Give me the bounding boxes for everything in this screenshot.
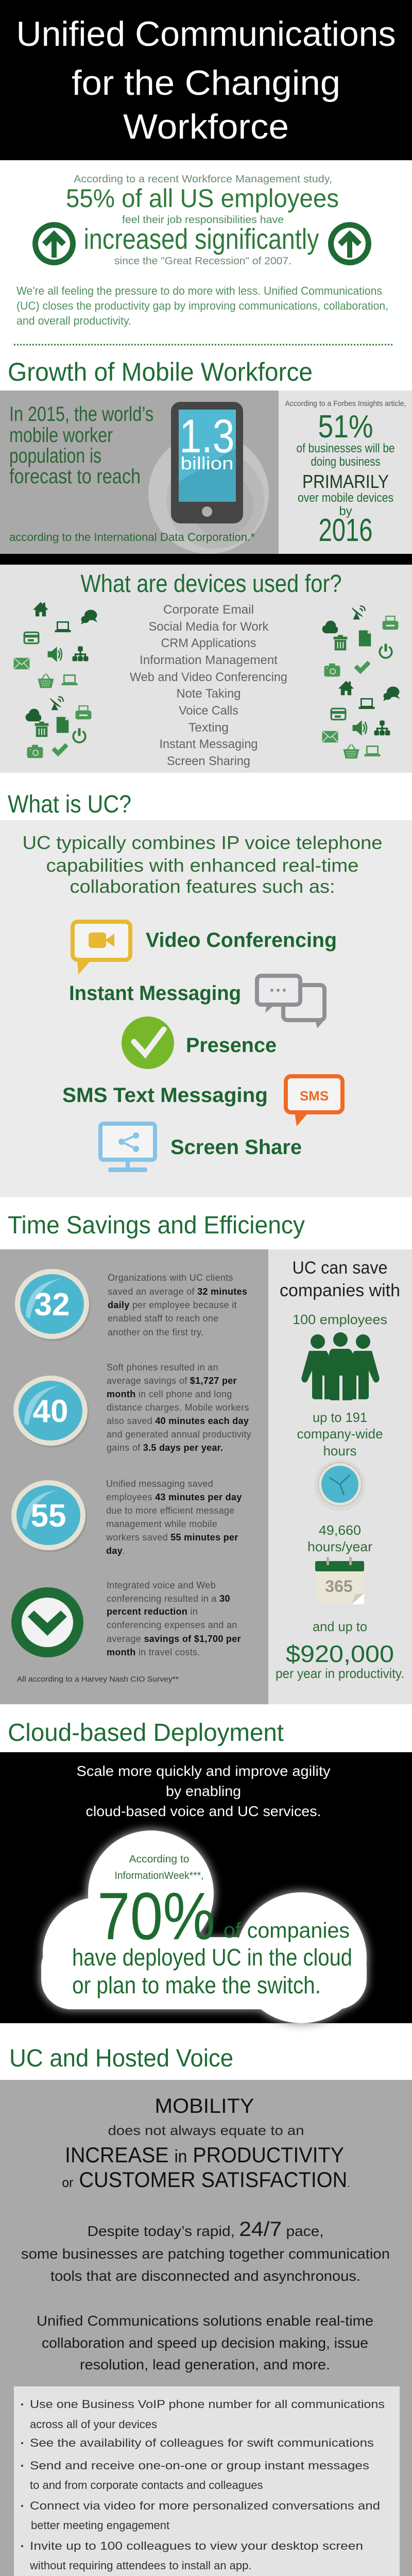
panel: time savings stats xyxy=(0,1249,268,1704)
panel: UC and hosted voice xyxy=(0,2080,412,2576)
text: stat 1: saved an average of 32 minutes xyxy=(108,1286,247,1297)
text: stat 4: percent reduction in xyxy=(107,1606,198,1617)
panel: UC can save companies: up to 191 xyxy=(313,1410,367,1425)
panel: forbes statistic: doing business xyxy=(311,455,380,469)
feature: screen share: Screen Share xyxy=(170,1136,302,1159)
paragraph: despite 24/7: some businesses are patching together communication xyxy=(21,2246,390,2262)
device uses list: Corporate Email xyxy=(163,603,254,617)
paragraph: UC solutions: collaboration and speed up decision making, issue xyxy=(42,2335,368,2351)
benefits list box: without requiring attendees to install an app. xyxy=(29,2559,252,2572)
intro statistic: increased significantly xyxy=(83,223,319,255)
paragraph: UC solutions: Unified Communications solutions enable real-time xyxy=(37,2313,373,2329)
device uses list xyxy=(130,603,287,768)
benefits list box: Connect via video for more personalized conversations and xyxy=(30,2499,380,2512)
text: stat 4: conferencing resulted in a 30 xyxy=(107,1594,230,1604)
intro paragraph xyxy=(16,284,388,327)
mobility statement: or CUSTOMER SATISFACTION. xyxy=(62,2167,350,2192)
feature: presence: Presence xyxy=(186,1034,277,1057)
panel: forbes statistic: According to a Forbes Insights article, xyxy=(285,399,406,408)
intro paragraph: and overall productivity. xyxy=(16,314,131,327)
paragraph: despite 24/7: tools that are disconnected and asynchronous. xyxy=(50,2268,360,2284)
benefits list box: See the availability of colleagues for swift communications xyxy=(30,2436,374,2449)
title banner: for the Changing xyxy=(72,63,340,103)
mobility statement: does not always equate to an xyxy=(108,2123,304,2138)
icon: calendar 365: 365 xyxy=(325,1577,353,1596)
paragraph: despite 24/7 xyxy=(21,2218,390,2284)
icon: smartphone xyxy=(171,402,243,523)
device uses list: Instant Messaging xyxy=(160,737,258,751)
device uses list: Social Media for Work xyxy=(148,620,269,634)
text: stat 2: Soft phones resulted in an xyxy=(107,1362,218,1372)
cloud callout: or plan to make the switch. xyxy=(72,1972,321,1998)
icon: up arrow right xyxy=(328,222,371,265)
device uses list: Web and Video Conferencing xyxy=(130,670,287,684)
panel: cloud deployment: by enabling xyxy=(166,1783,241,1799)
mobility statement: INCREASE in PRODUCTIVITY xyxy=(65,2143,344,2167)
feature: video conferencing: Video Conferencing xyxy=(146,929,337,952)
text: stat 4 xyxy=(107,1580,241,1657)
heading: devices: What are devices used for? xyxy=(80,570,342,598)
panel: forbes statistic: PRIMARILY xyxy=(302,471,389,492)
panel: forbes statistic: 2016 xyxy=(318,513,373,548)
benefits list box: across all of your devices xyxy=(30,2418,157,2431)
device uses list: Screen Sharing xyxy=(167,754,250,768)
stat circle 40 xyxy=(13,1376,89,1448)
text: stat 4: average savings of $1,700 per xyxy=(107,1634,241,1644)
panel: UC can save companies: 100 employees xyxy=(293,1312,387,1327)
benefits list box: Send and receive one-on-one or group instant messages xyxy=(30,2459,369,2472)
mobility statement xyxy=(62,2095,350,2192)
heading: what is UC: What is UC? xyxy=(8,791,131,818)
text: stat 1: Organizations with UC clients xyxy=(108,1273,233,1283)
intro statistic: since the "Great Recession" of 2007. xyxy=(114,256,291,267)
panel: UC can save companies: company-wide xyxy=(297,1426,383,1442)
icon: people xyxy=(301,1332,380,1400)
icon: down arrow xyxy=(11,1587,83,1657)
text: stat 3 xyxy=(106,1479,242,1556)
feature: instant messaging: Instant Messaging xyxy=(69,982,241,1005)
panel: cloud deployment xyxy=(0,1752,412,2025)
UC description: capabilities with enhanced real-time xyxy=(46,855,358,876)
panel: what is UC xyxy=(0,820,412,1197)
UC description: UC typically combines IP voice telephone xyxy=(23,832,383,853)
icon: smartphone: 1.3 xyxy=(179,410,235,463)
panel: mobile worker population: according to the International Data Corporation.* xyxy=(9,531,255,544)
title banner: Unified Communications xyxy=(16,14,396,54)
paragraph: UC solutions xyxy=(37,2313,373,2372)
panel: forbes statistic xyxy=(279,391,412,554)
text: stat 2: also saved 40 minutes each day xyxy=(107,1416,249,1426)
text: stat 3: Unified messaging saved xyxy=(106,1479,213,1489)
text: stat 2: gains of 3.5 days per year. xyxy=(107,1443,223,1453)
text: stat 2: month in cell phone and long xyxy=(107,1389,232,1399)
title banner: Workforce xyxy=(123,107,289,146)
panel: UC can save companies: hours xyxy=(323,1443,357,1459)
panel: UC can save companies: $920,000 xyxy=(286,1640,394,1667)
feature: instant messaging xyxy=(69,976,324,1028)
cloud callout xyxy=(40,1829,368,2025)
panel: UC can save companies: companies with xyxy=(280,1281,400,1300)
panel: cloud deployment: Scale more quickly and improve agility xyxy=(76,1763,331,1779)
panel: mobile worker population: forecast to reach xyxy=(9,465,141,488)
text: stat 3: day. xyxy=(106,1546,125,1556)
intro paragraph: We're all feeling the pressure to do more with less. Unified Communications xyxy=(16,284,382,297)
intro statistic: feel their job responsibilities have xyxy=(122,214,284,226)
text: stat 1: daily per employee because it xyxy=(108,1300,237,1310)
feature: SMS text messaging xyxy=(62,1076,342,1126)
cloud callout: According to xyxy=(129,1854,190,1865)
cloud callout: of companies xyxy=(224,1918,350,1942)
text: stat 3: employees 43 minutes per day xyxy=(106,1492,242,1502)
panel: mobile worker population: In 2015, the world’s xyxy=(9,403,153,426)
text: stat 1 xyxy=(108,1273,247,1337)
benefits list box xyxy=(14,2386,400,2576)
feature: presence xyxy=(122,1016,277,1069)
text: stat 2: distance charges. Mobile workers xyxy=(107,1402,249,1413)
icon: calendar 365 xyxy=(315,1557,364,1604)
panel: forbes statistic: of businesses will be xyxy=(297,442,394,455)
panel: UC can save companies: 49,660 xyxy=(319,1522,361,1538)
cloud callout: InformationWeek***, xyxy=(114,1870,204,1882)
feature: video conferencing xyxy=(73,922,337,975)
footnote: All according to a Harvey Nash CIO Survey** xyxy=(17,1675,179,1684)
device uses list: Information Management xyxy=(140,653,278,667)
text: stat 4: month in travel costs. xyxy=(107,1647,200,1657)
intro paragraph: (UC) closes the productivity gap by improving communications, collaboration, xyxy=(16,299,388,312)
feature: screen share xyxy=(100,1124,302,1172)
heading: cloud-based deployment: Cloud-based Deployment xyxy=(8,1719,284,1747)
stat circle 32 xyxy=(15,1269,91,1341)
text: stat 2: and generated annual productivity xyxy=(107,1429,251,1439)
text: stat 2 xyxy=(107,1362,251,1453)
text: stat 1: another on the first try. xyxy=(108,1327,203,1337)
icons: left cluster xyxy=(14,602,97,758)
panel: forbes statistic: 51% xyxy=(318,409,373,445)
intro statistic: According to a recent Workforce Management study, xyxy=(74,174,332,185)
stat circle 55: 55 xyxy=(31,1498,66,1534)
text: stat 2: average savings of $1,727 per xyxy=(107,1376,237,1386)
benefits list box: to and from corporate contacts and colleagues xyxy=(30,2479,263,2492)
icon: smartphone: billion xyxy=(180,454,234,473)
panel: UC can save companies: per year in productivity. xyxy=(276,1666,404,1681)
paragraph: UC solutions: resolution, lead generation, and more. xyxy=(80,2357,330,2372)
text: stat 3: management while mobile xyxy=(106,1519,217,1529)
text: stat 1: enabled staff to reach one xyxy=(108,1313,219,1324)
icon: clock xyxy=(314,1460,366,1511)
device uses list: Note Taking xyxy=(176,687,241,701)
text: stat 3: due to more efficient message xyxy=(106,1505,235,1516)
panel: forbes statistic: by xyxy=(339,504,352,518)
panel: what are devices used for xyxy=(0,565,412,773)
heading: UC and hosted voice: UC and Hosted Voice xyxy=(9,2045,233,2072)
stat circle 40: 40 xyxy=(33,1394,68,1429)
panel: cloud deployment: cloud-based voice and UC services. xyxy=(85,1803,321,1819)
panel: UC can save companies: and up to xyxy=(313,1619,367,1634)
text: stat 3: workers saved 55 minutes per xyxy=(106,1532,238,1543)
benefits list box: Invite up to 100 colleagues to view your desktop screen xyxy=(30,2539,363,2552)
panel: mobile worker population xyxy=(0,391,279,554)
intro statistic: 55% of all US employees xyxy=(66,184,339,213)
cloud callout: 70% xyxy=(97,1878,215,1954)
stat circle 32: 32 xyxy=(35,1287,70,1323)
UC description xyxy=(23,832,383,897)
title banner xyxy=(0,0,412,160)
UC description: collaboration features such as: xyxy=(70,876,335,897)
feature: SMS text messaging: SMS xyxy=(300,1088,329,1104)
heading: time savings: Time Savings and Efficiency xyxy=(8,1212,305,1239)
stat circle 55 xyxy=(11,1480,87,1552)
text: stat 4: conferencing expenses and an xyxy=(107,1620,237,1630)
panel: UC can save companies: hours/year xyxy=(307,1539,372,1554)
feature: SMS text messaging: SMS Text Messaging xyxy=(62,1084,268,1107)
cloud callout: have deployed UC in the cloud xyxy=(72,1944,352,1971)
benefits list box: better meeting engagement xyxy=(31,2519,169,2532)
benefits list box: Use one Business VoIP phone number for all communications xyxy=(30,2398,385,2411)
paragraph: despite 24/7: Despite today’s rapid, 24/7 pace, xyxy=(88,2218,323,2241)
mobility statement: MOBILITY xyxy=(154,2095,254,2117)
device uses list: Texting xyxy=(188,721,229,735)
panel: forbes statistic: over mobile devices xyxy=(298,491,393,505)
device uses list: CRM Applications xyxy=(161,636,256,650)
panel: UC can save companies xyxy=(268,1249,412,1704)
heading: growth of mobile workforce: Growth of Mobile Workforce xyxy=(8,358,313,386)
panel: mobile worker population: mobile worker xyxy=(9,424,113,447)
device uses list: Voice Calls xyxy=(179,704,238,718)
panel: mobile worker population: population is xyxy=(9,445,101,467)
panel: UC can save companies: UC can save xyxy=(293,1258,387,1278)
intro statistic xyxy=(66,174,339,267)
icon: up arrow left xyxy=(32,222,76,265)
text: stat 4: Integrated voice and Web xyxy=(107,1580,216,1590)
icons: right cluster xyxy=(322,606,399,758)
